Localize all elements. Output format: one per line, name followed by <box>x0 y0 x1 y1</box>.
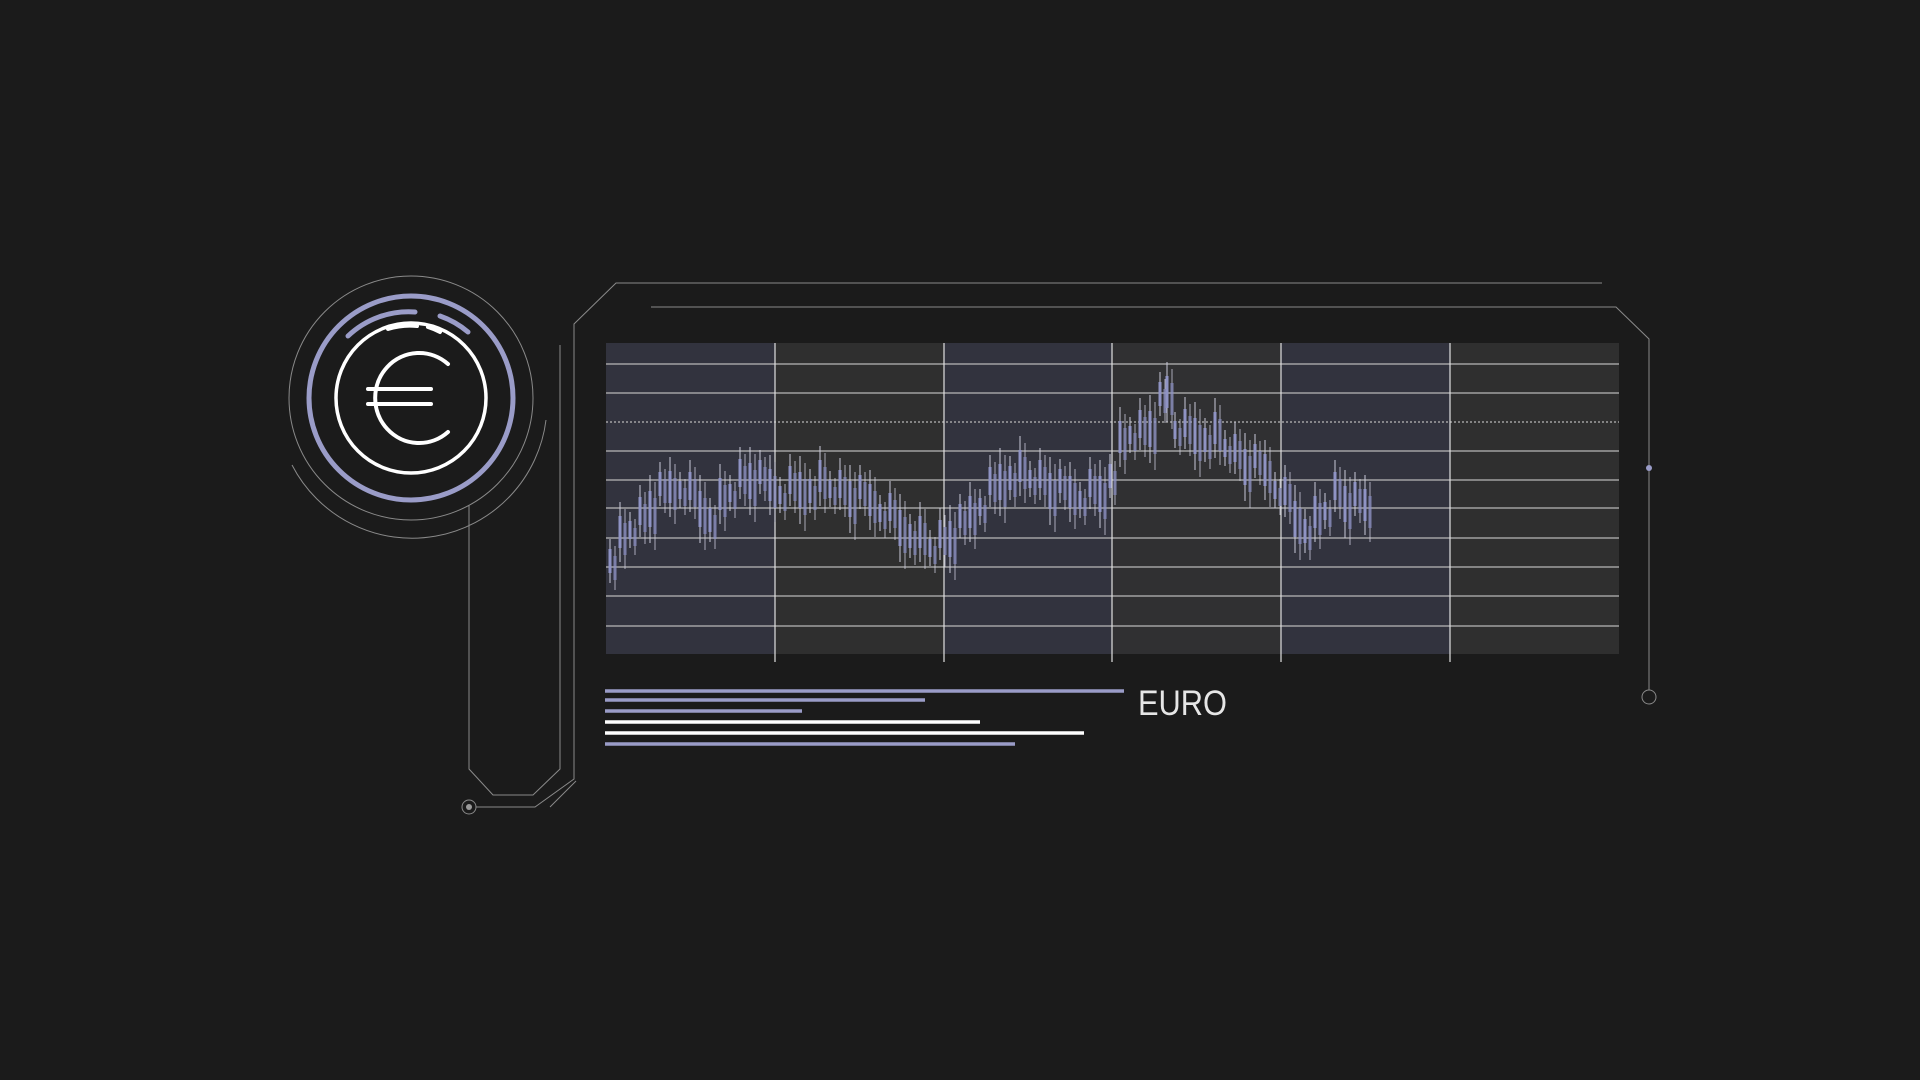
connector lines right <box>651 307 1656 704</box>
legend bars <box>605 691 1124 744</box>
chart: euro candlestick <box>606 343 1619 662</box>
icon: euro coin <box>289 276 546 538</box>
connector lines left <box>462 283 1602 814</box>
icon: euro symbol <box>368 353 448 443</box>
label: EURO: EURO <box>1138 684 1227 723</box>
